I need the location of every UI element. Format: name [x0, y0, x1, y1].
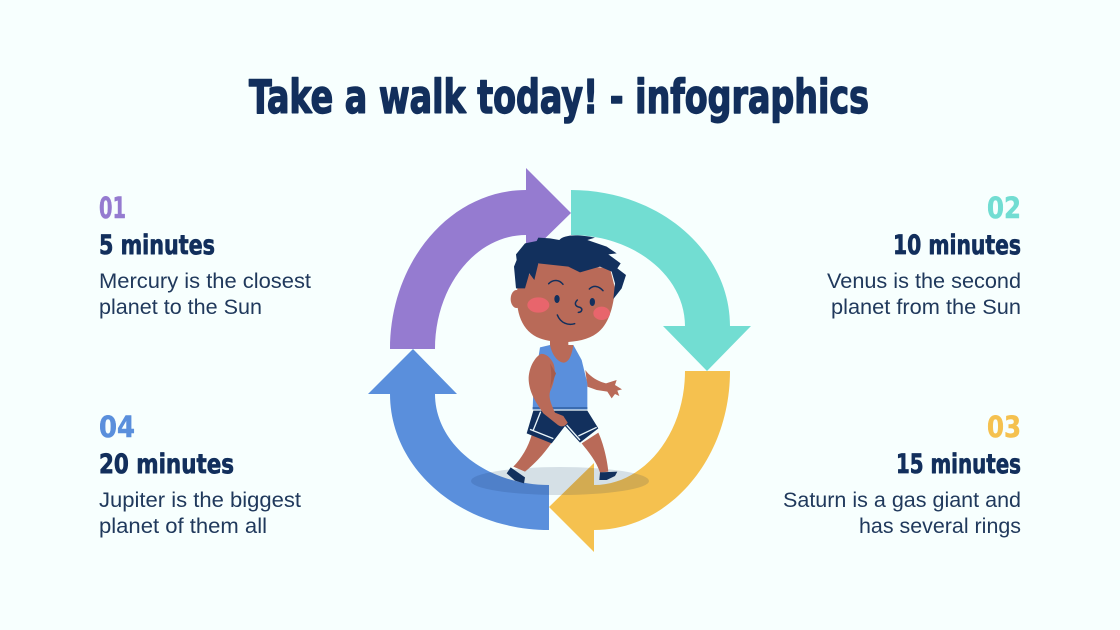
heading 15 minutes: 15 minutes	[896, 449, 1021, 480]
number 04: 04	[99, 410, 135, 444]
description 01: Mercury is the closest	[99, 270, 311, 293]
walking boy illustration	[507, 235, 626, 483]
face	[517, 262, 615, 342]
boy body	[507, 340, 622, 483]
step 04: 20 minutes	[99, 410, 301, 538]
description 03: Saturn is a gas giant and	[783, 489, 1021, 512]
step 03: 15 minutes	[783, 410, 1021, 538]
eyes	[554, 295, 560, 303]
back arm	[585, 370, 622, 398]
brows, nose, mouth	[549, 280, 603, 324]
legs	[513, 435, 552, 472]
description 02: Venus is the second	[827, 270, 1021, 293]
number 02: 02	[987, 191, 1021, 225]
arrow: blue	[368, 349, 549, 530]
arrow: purple	[390, 168, 571, 349]
step 02: 10 minutes	[827, 191, 1021, 319]
step 01: 5 minutes	[99, 191, 311, 319]
arrow: teal	[571, 190, 751, 371]
cheeks	[527, 297, 549, 313]
tank top	[533, 345, 587, 409]
front arm	[529, 354, 568, 426]
description 02: planet from the Sun	[831, 296, 1021, 319]
shoes	[507, 467, 525, 483]
hair	[514, 235, 626, 299]
boy head	[511, 235, 626, 342]
heading 5 minutes: 5 minutes	[99, 230, 215, 261]
description 04: planet of them all	[99, 515, 267, 538]
shorts	[527, 411, 598, 443]
description 03: has several rings	[859, 515, 1021, 538]
description 04: Jupiter is the biggest	[99, 489, 301, 512]
ear	[511, 290, 523, 308]
heading 10 minutes: 10 minutes	[893, 230, 1021, 261]
title: Take a walk today! - infographics	[249, 70, 869, 124]
arrow: yellow	[549, 371, 730, 552]
cycle of four arrows	[368, 168, 751, 552]
number 03: 03	[987, 410, 1021, 444]
description 01: planet to the Sun	[99, 296, 262, 319]
heading 20 minutes: 20 minutes	[99, 449, 234, 480]
number 01: 01	[99, 191, 126, 225]
neck and chest	[550, 340, 573, 363]
ground shadow	[471, 467, 649, 495]
